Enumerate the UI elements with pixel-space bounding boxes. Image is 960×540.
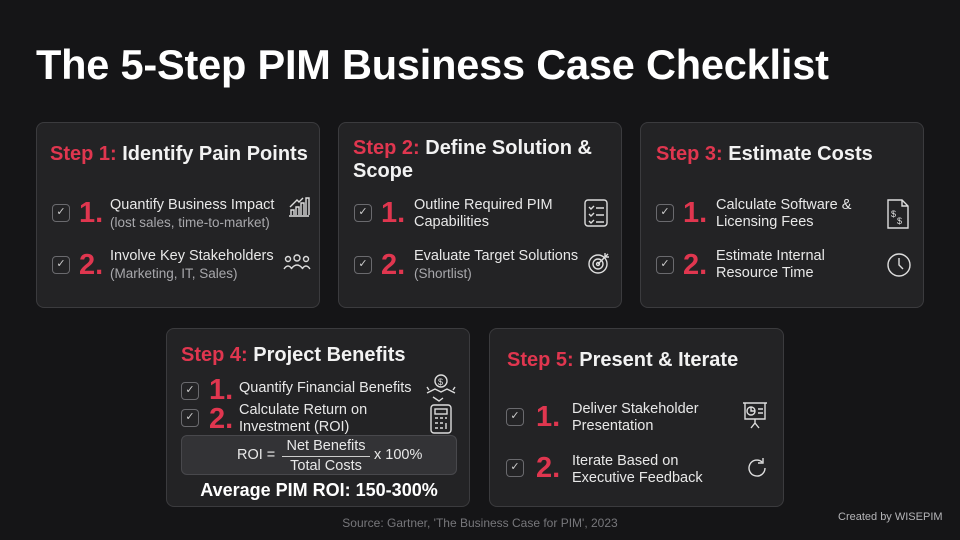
item 2 xyxy=(354,248,609,281)
item 1: ✓ xyxy=(358,206,368,218)
item 1: Presentation xyxy=(572,418,653,434)
ROI formula xyxy=(181,435,457,475)
item 1: ✓ xyxy=(56,206,66,218)
item 1 xyxy=(52,197,310,230)
item 2: 2. xyxy=(209,403,233,435)
heading step 5: Step 5: Present & Iterate xyxy=(507,349,738,371)
item 1: Quantify Financial Benefits xyxy=(239,380,411,396)
item 2: 2. xyxy=(79,249,103,281)
item 1: Capabilities xyxy=(414,214,489,230)
item 2 xyxy=(181,402,452,435)
heading step 4: Step 4: Project Benefits xyxy=(181,344,406,366)
item 1: ✓ xyxy=(185,384,195,396)
panel: step 2 xyxy=(338,122,622,308)
item 1: 1. xyxy=(683,197,707,229)
item 1: Outline Required PIM xyxy=(414,197,553,213)
item 2: 2. xyxy=(381,249,405,281)
item 2: Estimate Internal xyxy=(716,248,825,264)
panel: step 3 xyxy=(640,122,924,308)
title: The 5-Step PIM Business Case Checklist xyxy=(36,41,829,88)
item 2: 2. xyxy=(536,452,560,484)
item 2: (Marketing, IT, Sales) xyxy=(110,266,238,281)
item 1: ✓ xyxy=(510,410,520,422)
item 2: ✓ xyxy=(185,411,195,423)
item 2: Resource Time xyxy=(716,265,814,281)
heading step 3: Step 3: Estimate Costs xyxy=(656,143,873,165)
item 2: Iterate Based on xyxy=(572,453,678,469)
item 2: Involve Key Stakeholders xyxy=(110,248,274,264)
heading step 2: Step 2: Define Solution & xyxy=(353,137,592,159)
item 1: Licensing Fees xyxy=(716,214,814,230)
item 2 xyxy=(52,248,310,281)
item 1 xyxy=(354,197,608,230)
item 2: Investment (ROI) xyxy=(239,419,349,435)
panel: step 5 xyxy=(489,328,784,507)
item 2: Evaluate Target Solutions xyxy=(414,248,578,264)
item 1: Deliver Stakeholder xyxy=(572,401,699,417)
ROI formula: Net Benefits Total Costs xyxy=(286,438,366,474)
item 1: (lost sales, time-to-market) xyxy=(110,215,270,230)
item 2: ✓ xyxy=(660,258,670,270)
item 2: ✓ xyxy=(358,258,368,270)
item 1: 1. xyxy=(536,401,560,433)
heading step 2: Scope xyxy=(353,160,413,182)
panel: step 1 xyxy=(36,122,320,308)
item 2: (Shortlist) xyxy=(414,266,472,281)
item 1: ✓ xyxy=(660,206,670,218)
item 2: ✓ xyxy=(510,461,520,473)
item 2: 2. xyxy=(683,249,707,281)
item 1: Calculate Software & xyxy=(716,197,851,213)
ROI formula: ROI = xyxy=(237,447,275,463)
item 1: $ xyxy=(438,377,443,387)
item 2: ✓ xyxy=(56,258,66,270)
item 1 xyxy=(506,401,767,434)
item 1: Quantify Business Impact xyxy=(110,197,274,213)
item 1: $ xyxy=(891,209,896,219)
item 1 xyxy=(656,197,909,230)
heading step 1: Step 1: Identify Pain Points xyxy=(50,143,308,165)
heading step 2 xyxy=(353,137,592,182)
item 1: 1. xyxy=(381,197,405,229)
credit: Created by WISEPIM xyxy=(838,511,943,523)
item 1: 1. xyxy=(79,197,103,229)
item 2: Calculate Return on xyxy=(239,402,367,418)
source note: Source: Gartner, 'The Business Case for PIM', 2023 xyxy=(342,516,618,530)
item 2: Executive Feedback xyxy=(572,470,703,486)
item 2 xyxy=(656,248,911,281)
average ROI: Average PIM ROI: 150-300% xyxy=(200,480,438,500)
item 1: $ xyxy=(897,216,902,226)
panel: step 4 xyxy=(166,328,470,507)
item 2 xyxy=(506,452,766,486)
item 1 xyxy=(181,374,456,406)
item 1: 1. xyxy=(209,374,233,406)
ROI formula: x 100% xyxy=(374,447,422,463)
